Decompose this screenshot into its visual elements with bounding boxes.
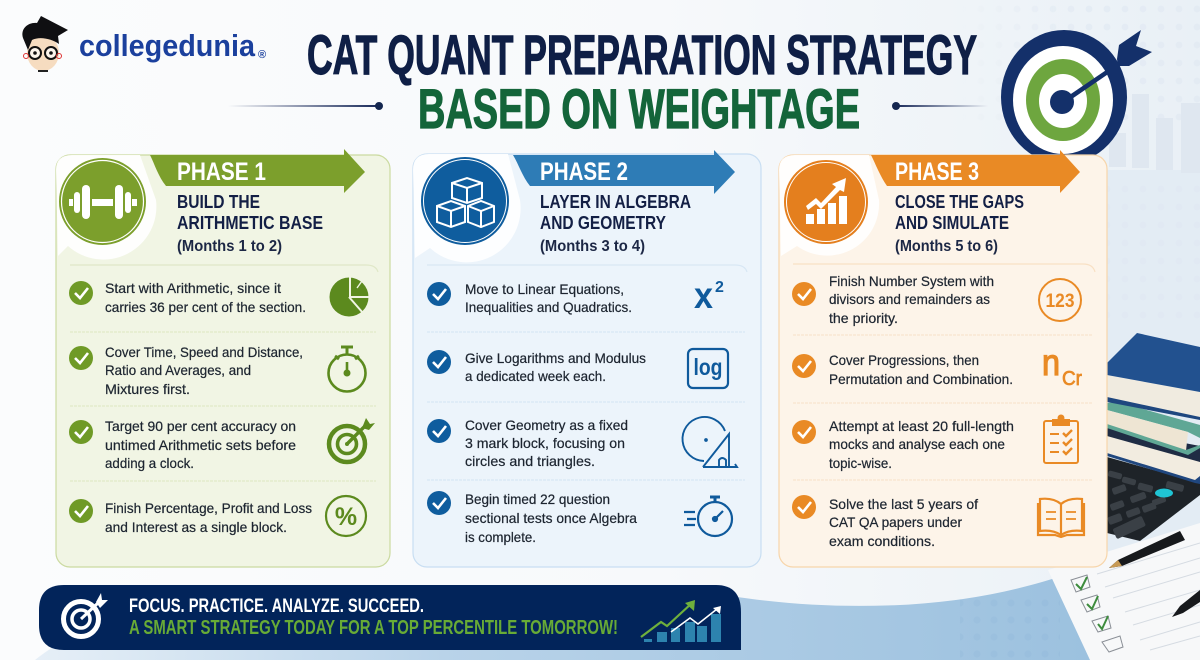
wordmark: collegedunia	[79, 28, 256, 63]
row 3: Cover Geometry as a fixed	[465, 417, 628, 433]
header divider	[70, 265, 378, 272]
logo	[22, 16, 266, 71]
row 2: Cover Progressions, then	[829, 352, 979, 368]
icon: nCr: Cr	[1062, 368, 1082, 390]
heading: phase 3: AND SIMULATE	[895, 213, 1009, 233]
arrow banner: phase 1	[150, 149, 365, 193]
icon: dumbbell badge	[56, 155, 156, 260]
heading: phase 1	[177, 192, 323, 255]
icon: log box: log	[694, 354, 722, 380]
icon: open book	[1038, 499, 1084, 537]
row 4: is complete.	[465, 529, 536, 545]
row 2: Cover Time, Speed and Distance,	[105, 344, 303, 360]
row 1: the priority.	[829, 310, 898, 326]
icon: nCr	[1042, 342, 1082, 390]
row 2: a dedicated week each.	[465, 368, 606, 384]
icon: 123 circle	[1039, 279, 1081, 321]
photo: calculator keys	[1107, 470, 1184, 539]
row 2: Permutation and Combination.	[829, 371, 1013, 387]
photo: stack of books	[1107, 333, 1200, 541]
row 4: Finish Percentage, Profit and Loss	[105, 500, 312, 516]
heading: phase 3	[895, 192, 1024, 255]
row 3: 3 mark block, focusing on	[465, 435, 625, 451]
icon: clipboard	[1044, 416, 1078, 463]
heading: phase 2	[540, 192, 691, 255]
photo: checklist paper	[1048, 523, 1200, 660]
heading: phase 2: AND GEOMETRY	[540, 213, 666, 233]
icon: mascot	[22, 16, 68, 71]
heading: phase 2: (Months 3 to 4)	[540, 238, 645, 255]
row 2: Ratio and Averages, and	[105, 362, 251, 378]
row 3: topic-wise.	[829, 455, 892, 471]
header divider	[793, 264, 1095, 272]
row 3: Target 90 per cent accuracy on	[105, 418, 296, 434]
heading: phase 1: (Months 1 to 2)	[177, 238, 282, 255]
row 3: untimed Arithmetic sets before	[105, 437, 296, 453]
header divider	[427, 265, 747, 272]
row 4	[69, 496, 366, 536]
icon: 123 circle: 123	[1046, 291, 1074, 312]
row 1: Start with Arithmetic, since it	[105, 280, 281, 296]
background blue wave	[35, 560, 1200, 660]
heading: phase 1: ARITHMETIC BASE	[177, 213, 323, 233]
icon: percent	[326, 496, 366, 536]
title: BASED ON WEIGHTAGE	[418, 77, 860, 140]
footer text: A SMART STRATEGY TODAY FOR A TOP PERCENTILE TOMORROW!	[129, 617, 618, 639]
row 3: mocks and analyse each one	[829, 436, 1005, 452]
arrow banner: phase 2	[513, 150, 735, 194]
row 4: CAT QA papers under	[829, 514, 962, 530]
row 1	[69, 276, 370, 316]
heading: phase 3: (Months 5 to 6)	[895, 238, 998, 255]
row 1: divisors and remainders as	[829, 291, 990, 307]
icon: target with arrow	[1001, 30, 1152, 164]
heading: phase 1: BUILD THE	[177, 192, 260, 212]
icon: x squared: 2	[715, 279, 724, 296]
footer banner	[39, 585, 741, 650]
icon: target	[329, 418, 375, 462]
row 3	[69, 418, 375, 471]
heading: phase 3: CLOSE THE GAPS	[895, 192, 1024, 212]
row 4: sectional tests once Algebra	[465, 510, 637, 526]
row 1: Finish Number System with	[829, 273, 994, 289]
icon: footer growth chart	[641, 600, 721, 642]
panel: phase 1	[56, 149, 390, 567]
row 3: Attempt at least 20 full-length	[829, 418, 1014, 434]
row 1: Inequalities and Quadratics.	[465, 299, 632, 315]
row 2	[69, 344, 366, 397]
row 3: adding a clock.	[105, 455, 194, 471]
row 1	[427, 275, 724, 316]
icon: stopwatch	[328, 347, 366, 392]
footer text: FOCUS. PRACTICE. ANALYZE. SUCCEED.	[129, 596, 424, 617]
title	[307, 23, 977, 140]
icon: x squared: x	[694, 275, 713, 316]
icon: circle and triangle	[683, 417, 737, 467]
row 2: Mixtures first.	[105, 381, 190, 397]
registered mark: ®	[258, 49, 266, 61]
icon: pie chart	[330, 276, 370, 316]
heading: phase 2: LAYER IN ALGEBRA	[540, 192, 691, 212]
row 3	[792, 416, 1078, 471]
row 1: Move to Linear Equations,	[465, 281, 624, 297]
icon: speed timer	[684, 497, 732, 536]
row 2: Give Logarithms and Modulus	[465, 350, 646, 366]
row 4: exam conditions.	[829, 533, 935, 549]
row 4	[427, 491, 732, 545]
row 4: Begin timed 22 question	[465, 491, 610, 507]
arrow banner: phase 2: PHASE 2	[540, 158, 628, 186]
row 2	[427, 349, 728, 388]
background chart bars	[1109, 94, 1200, 173]
icon: percent: %	[335, 503, 357, 531]
row 3: circles and triangles.	[465, 453, 595, 469]
row 4: and Interest as a single block.	[105, 519, 287, 535]
panel: phase 3	[779, 150, 1107, 567]
icon: growth chart badge	[779, 155, 879, 256]
row 2	[792, 342, 1082, 390]
row 3	[427, 417, 737, 469]
row 4	[792, 495, 1084, 549]
row 1: carries 36 per cent of the section.	[105, 299, 306, 315]
title divider left	[228, 102, 383, 110]
footer text	[129, 596, 618, 639]
icon: x squared	[694, 275, 724, 316]
icon: footer target	[64, 593, 108, 636]
arrow banner: phase 3: PHASE 3	[895, 158, 979, 186]
row 4: Solve the last 5 years of	[829, 496, 978, 512]
icon: log box	[688, 349, 728, 388]
icon: blocks badge	[413, 154, 521, 262]
arrow banner: phase 3	[871, 150, 1080, 193]
row 1	[792, 273, 1081, 326]
title divider right	[892, 102, 988, 110]
panel: phase 2	[413, 150, 761, 567]
arrow banner: phase 1: PHASE 1	[177, 158, 266, 186]
photo: pens	[1109, 531, 1200, 617]
icon: nCr: n	[1042, 342, 1060, 383]
